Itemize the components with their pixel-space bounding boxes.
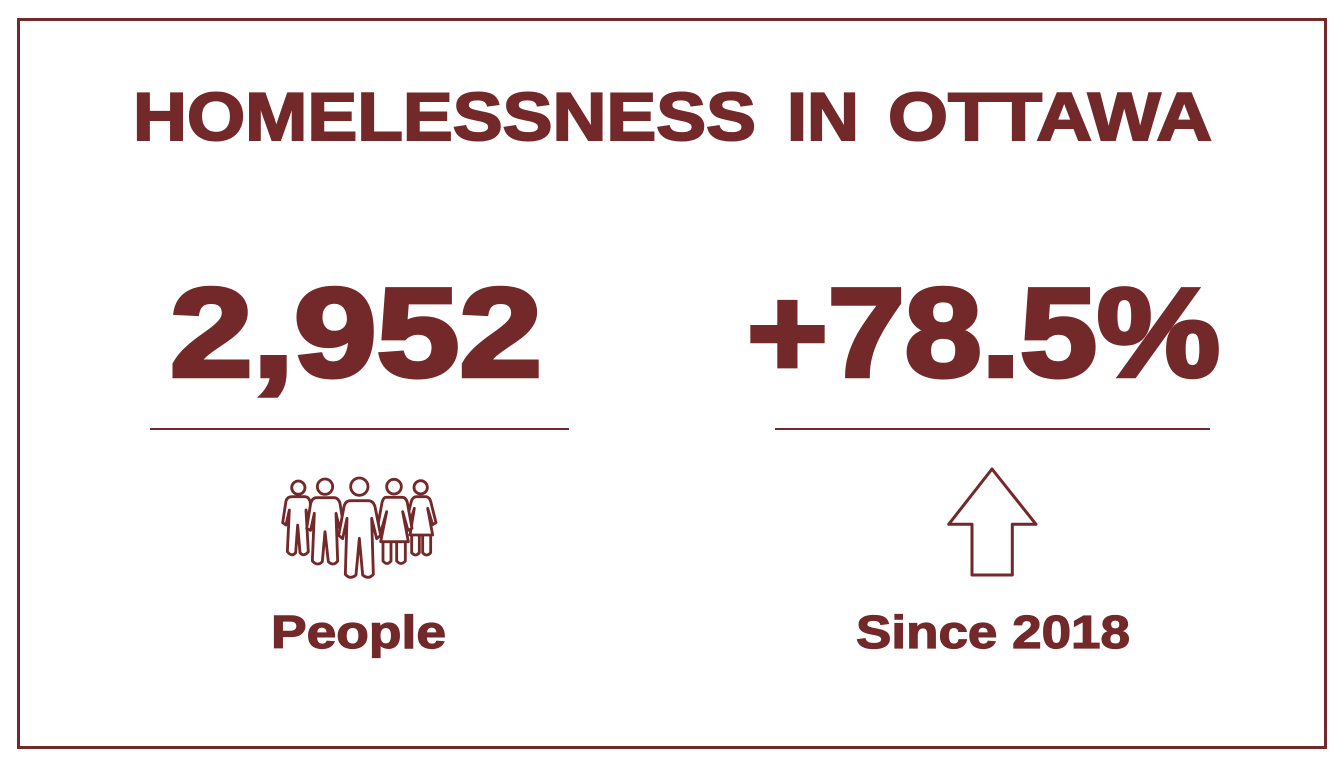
title [133,79,1212,155]
title: OTTAWA [888,79,1212,155]
divider: left [150,428,569,430]
panel: people count [150,262,569,658]
statistic: 2,952: 2,952 [170,262,542,403]
label: Since 2018: Since 2018 [856,606,1130,658]
title: HOMELESSNESS [133,79,756,155]
panel: change since 2018 [747,262,1220,658]
divider: right [775,428,1210,430]
statistic: +78.5%: +78.5% [747,262,1220,403]
icon: group of people [283,478,436,577]
label: People: People [271,606,446,658]
title: IN [787,79,859,155]
icon: up arrow [949,469,1036,575]
